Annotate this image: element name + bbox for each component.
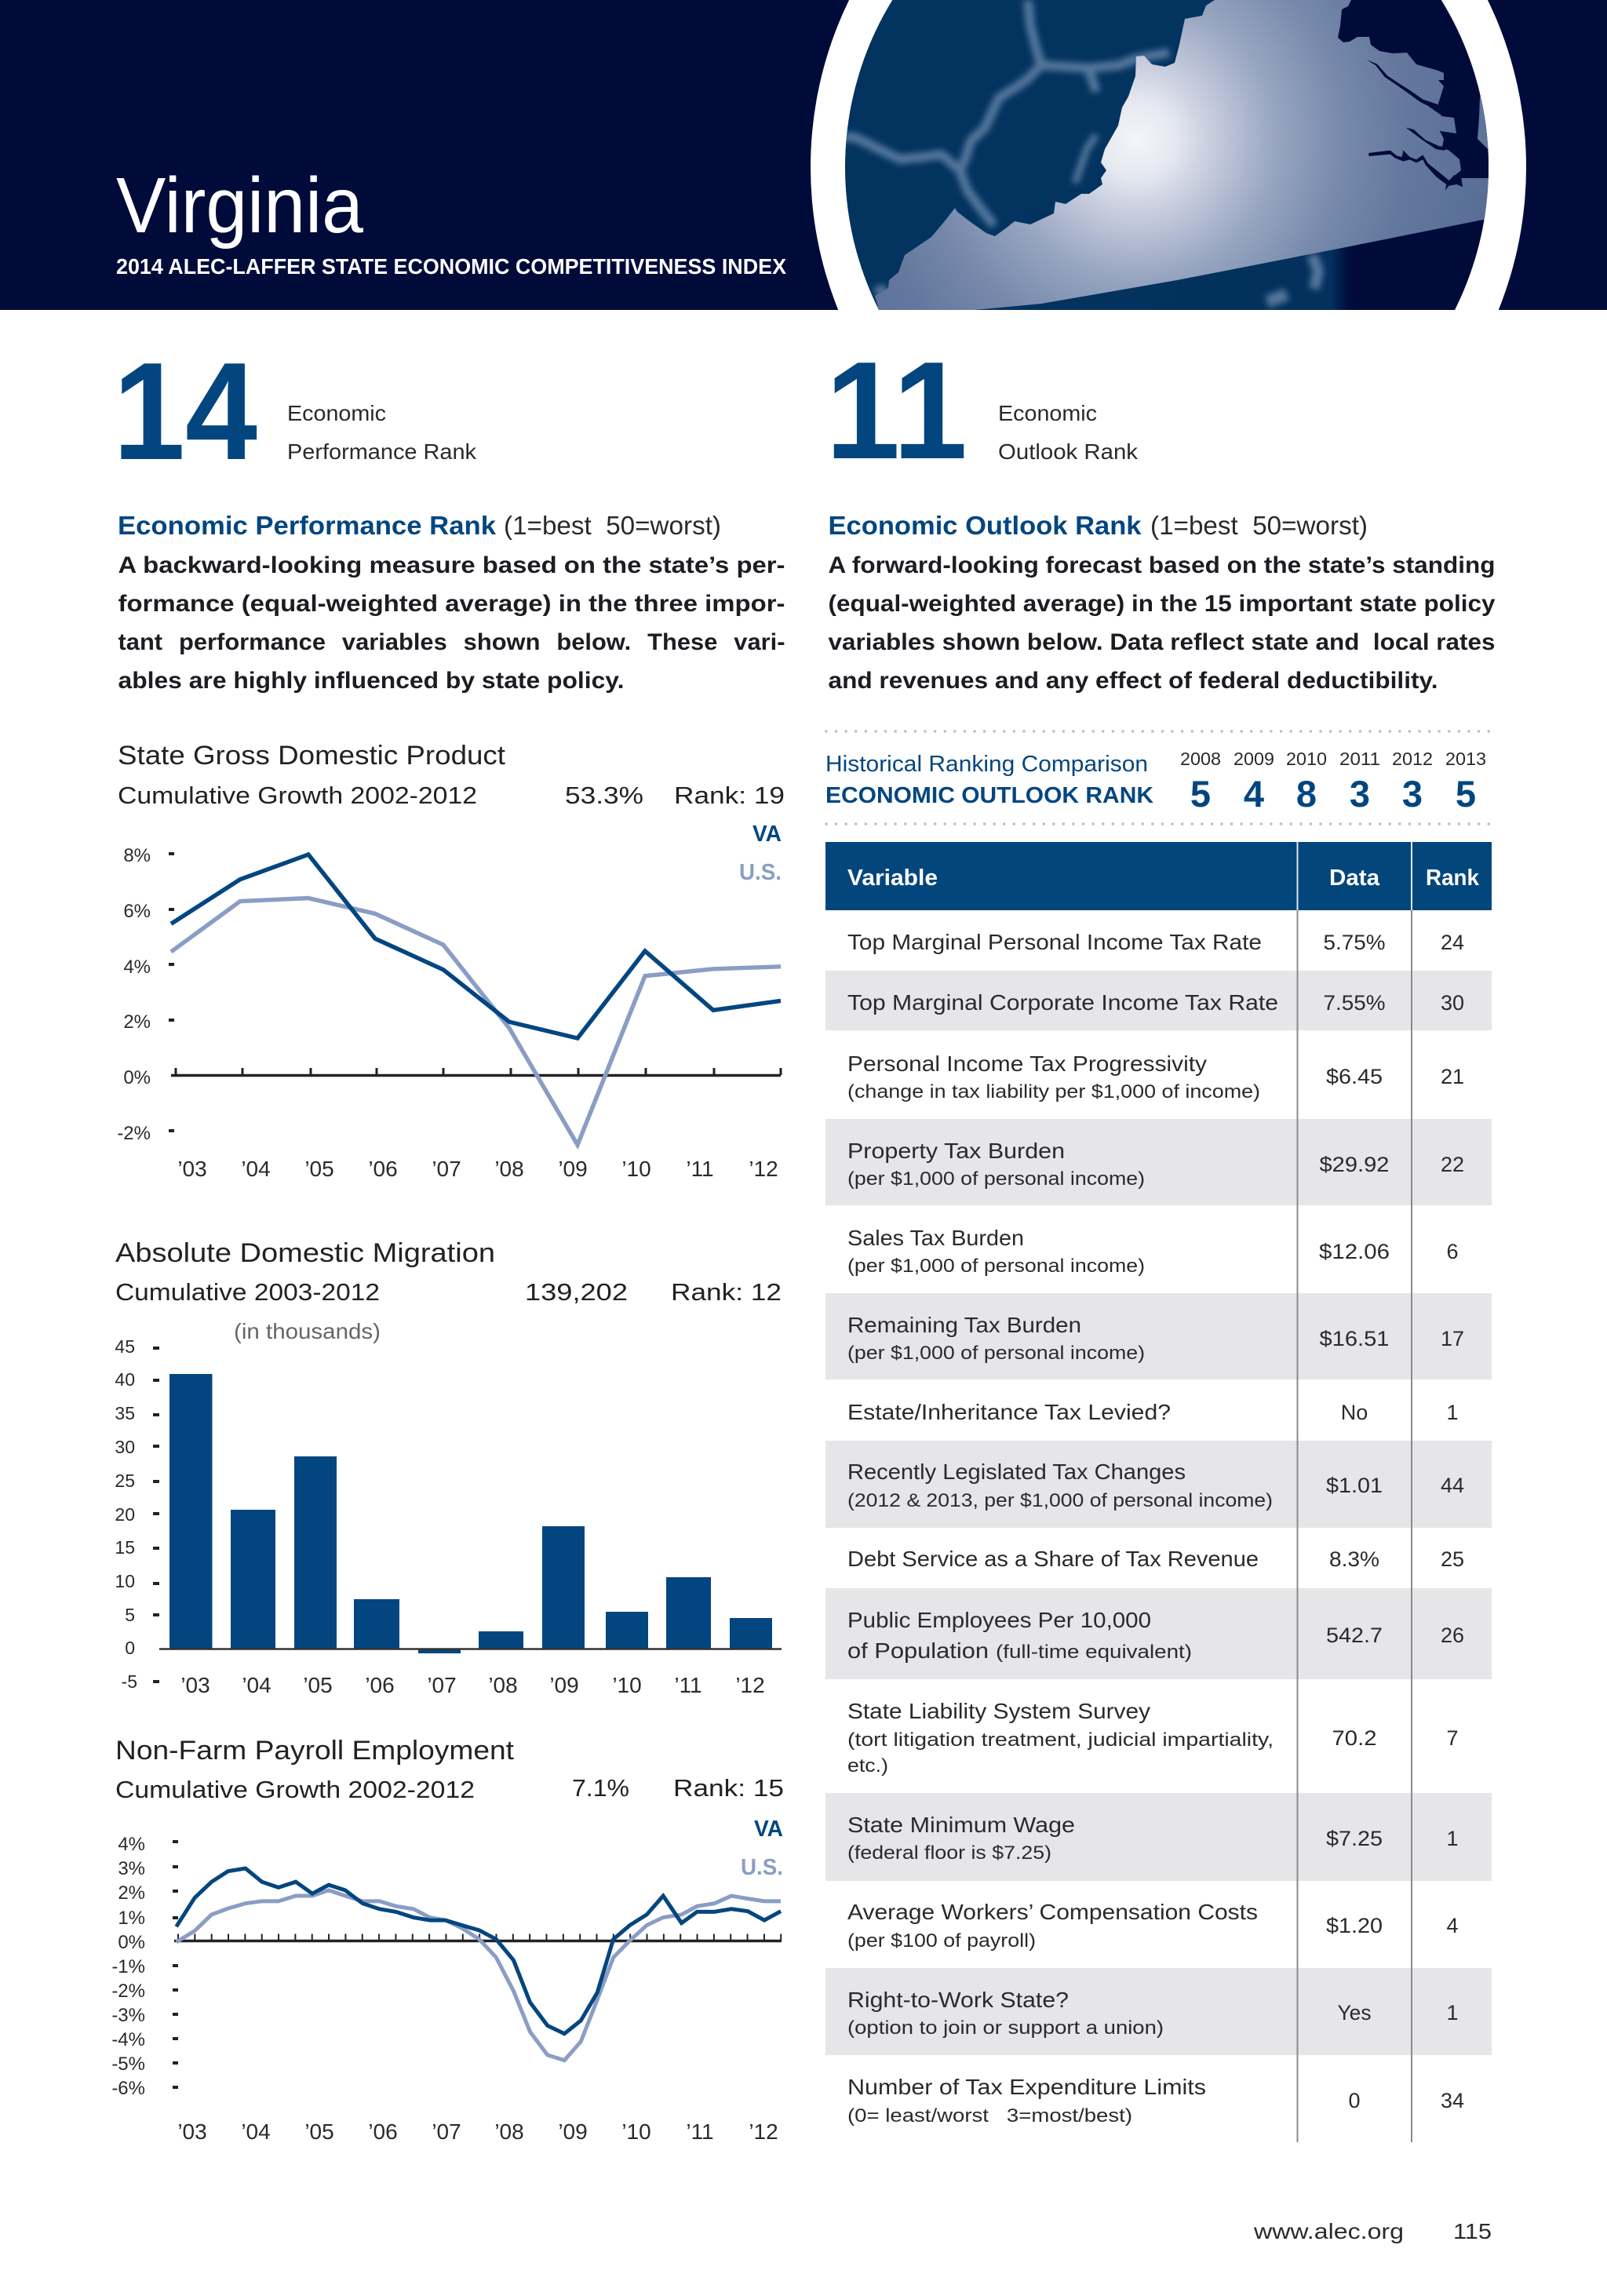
year labels: 2013 <box>1445 749 1486 769</box>
line chart: GDP growth: ’11 <box>686 1157 714 1181</box>
comparison label: ECONOMIC OUTLOOK RANK <box>825 783 1153 808</box>
bar chart: domestic migration: ’03 <box>180 1673 210 1697</box>
row: state liability system survey: 7 <box>1446 1726 1459 1750</box>
panel: economic outlook rank <box>825 333 1496 694</box>
row: top marginal personal income tax rate <box>847 930 1464 954</box>
chart heading: 53.3% <box>565 782 643 809</box>
line chart: GDP growth: ’10 <box>621 1157 651 1181</box>
bar chart: domestic migration: ’09 <box>549 1673 579 1697</box>
line chart: GDP growth: 8% <box>123 845 151 866</box>
rank values by year: 3 <box>1402 773 1423 815</box>
line chart: payroll employment: ’12 <box>749 2119 778 2144</box>
row: remaining tax burden: Remaining Tax Burden <box>847 1313 1081 1337</box>
year labels: 2008 <box>1180 749 1221 769</box>
bar chart: domestic migration: 25 <box>115 1471 135 1491</box>
chart heading: Cumulative Growth 2002-2012 <box>115 1776 475 1803</box>
line chart: GDP growth: -2% <box>117 1123 151 1144</box>
row: right-to-work state <box>847 1988 1459 2039</box>
chart heading: 139,202 <box>525 1278 628 1306</box>
line chart: GDP growth: ’05 <box>304 1157 334 1181</box>
row: personal income tax progressivity <box>847 1051 1464 1102</box>
bar chart: domestic migration: 35 <box>115 1403 135 1423</box>
line chart: payroll employment: 0% <box>118 1932 145 1953</box>
heading: Economic Performance Rank <box>118 511 497 540</box>
bar chart: domestic migration: ’06 <box>365 1673 395 1697</box>
year labels: 2011 <box>1339 749 1380 769</box>
row: personal income tax progressivity: $6.45 <box>1326 1065 1383 1088</box>
row: personal income tax progressivity: Personal Income Tax Progressivity <box>847 1051 1207 1076</box>
line chart: payroll employment: ’05 <box>304 2119 334 2144</box>
line chart: GDP growth: ’04 <box>241 1157 271 1181</box>
table header: Variable <box>847 866 938 891</box>
description text: A backward-looking measure based on the state’s per- <box>118 552 785 578</box>
line chart: payroll employment: ’07 <box>432 2119 461 2144</box>
row: property tax burden: $29.92 <box>1320 1153 1389 1176</box>
bar chart: domestic migration: 20 <box>115 1504 135 1525</box>
row: state liability system survey: etc.) <box>847 1755 888 1777</box>
rank values by year <box>1190 773 1476 815</box>
bar chart: domestic migration: 0 <box>125 1638 135 1658</box>
bar chart: domestic migration: ’04 <box>242 1673 271 1697</box>
row: right-to-work state: Yes <box>1337 2001 1372 2024</box>
bar chart: domestic migration: ’10 <box>612 1673 642 1697</box>
legend: VA <box>752 822 782 847</box>
big number: performance rank: 14 <box>113 333 257 489</box>
bar chart: domestic migration: 45 <box>115 1336 135 1357</box>
line chart: payroll employment: ’03 <box>177 2119 207 2144</box>
row: sales tax burden: Sales Tax Burden <box>847 1226 1024 1250</box>
panel: historical ranking comparison <box>825 731 1492 824</box>
line chart: GDP growth: ’09 <box>558 1157 588 1181</box>
year labels: 2012 <box>1392 749 1433 769</box>
row: top marginal personal income tax rate: Top Marginal Personal Income Tax Rate <box>847 930 1262 954</box>
row: estate/inheritance tax levied: Estate/Inheritance Tax Levied? <box>847 1400 1171 1424</box>
bar chart: domestic migration: -5 <box>122 1671 137 1692</box>
row: sales tax burden <box>847 1226 1459 1277</box>
legend <box>739 822 782 885</box>
row: state liability system survey: State Liability System Survey <box>847 1699 1150 1723</box>
row: number of tax expenditure limits: Number of Tax Expenditure Limits <box>847 2075 1206 2099</box>
row: recently legislated tax changes: 44 <box>1441 1474 1464 1497</box>
row: state minimum wage: $7.25 <box>1326 1827 1383 1850</box>
year labels <box>1180 749 1486 769</box>
bar chart: domestic migration: 30 <box>115 1437 135 1457</box>
heading: (1=best 50=worst) <box>504 511 721 540</box>
rank caption: Economic <box>998 401 1097 425</box>
chart heading: Rank: 19 <box>674 782 785 809</box>
row: number of tax expenditure limits: 34 <box>1441 2089 1464 2112</box>
rank values by year: 4 <box>1244 773 1264 815</box>
line chart: payroll employment: -6% <box>111 2078 145 2099</box>
description text: (equal-weighted average) in the 15 important state policy <box>829 591 1496 617</box>
panel: non-farm payroll employment <box>111 1736 784 2144</box>
row: average workers' compensation costs: Average Workers’ Compensation Costs <box>847 1900 1258 1924</box>
line chart: payroll employment: ’06 <box>368 2119 398 2144</box>
row: public employees per 10,000 of population: 542.7 <box>1326 1624 1383 1647</box>
row: top marginal personal income tax rate: 5.75% <box>1323 931 1386 954</box>
line chart: payroll employment: -2% <box>111 1981 145 2002</box>
row: public employees per 10,000 of population <box>847 1608 1464 1663</box>
row: sales tax burden: (per $1,000 of personal income) <box>847 1256 1145 1277</box>
chart heading: Cumulative Growth 2002-2012 <box>118 782 477 809</box>
legend: U.S. <box>739 860 782 885</box>
row: state liability system survey: (tort litigation treatment, judicial impartiality, <box>847 1729 1274 1751</box>
line chart: GDP growth: ’08 <box>494 1157 524 1181</box>
bar chart: domestic migration: 5 <box>125 1605 135 1625</box>
bar chart: domestic migration: 15 <box>115 1537 135 1558</box>
row: number of tax expenditure limits <box>847 2075 1464 2127</box>
row: top marginal corporate income tax rate: Top Marginal Corporate Income Tax Rate <box>847 990 1278 1015</box>
line chart: payroll employment: -3% <box>111 2005 145 2026</box>
bar chart: domestic migration: ’07 <box>427 1673 457 1697</box>
row: state liability system survey <box>847 1699 1459 1777</box>
panel: state gross domestic product <box>117 741 785 1181</box>
footer <box>1253 2219 1492 2243</box>
chart heading: 7.1% <box>572 1774 629 1802</box>
row: recently legislated tax changes: (2012 & 2013, per $1,000 of personal income) <box>847 1490 1273 1511</box>
line chart: payroll employment: ’09 <box>558 2119 588 2144</box>
table header: Data <box>1329 866 1380 891</box>
line chart: payroll employment: -5% <box>111 2054 145 2075</box>
line chart: GDP growth: ’06 <box>368 1157 398 1181</box>
line chart: payroll employment: -4% <box>111 2029 145 2050</box>
chart heading: Non-Farm Payroll Employment <box>115 1736 515 1766</box>
heading: (1=best 50=worst) <box>1150 511 1368 540</box>
row: average workers' compensation costs <box>847 1900 1459 1952</box>
table header: Rank <box>1426 866 1480 891</box>
heading <box>118 511 721 540</box>
chart heading: Cumulative 2003-2012 <box>115 1278 380 1306</box>
row: debt service as a share of tax revenue: 25 <box>1441 1547 1464 1571</box>
row: top marginal corporate income tax rate: 7.55% <box>1323 991 1386 1015</box>
big number: outlook rank: 11 <box>825 333 967 488</box>
heading <box>829 511 1368 540</box>
row: remaining tax burden: 17 <box>1441 1327 1464 1350</box>
rank caption: Economic <box>287 401 386 425</box>
panel: absolute domestic migration <box>115 1238 782 1697</box>
rank caption: Outlook Rank <box>998 439 1139 464</box>
row: remaining tax burden <box>847 1313 1464 1364</box>
bar chart: domestic migration: 10 <box>115 1571 135 1591</box>
chart heading: State Gross Domestic Product <box>118 741 506 771</box>
row: public employees per 10,000 of population: 26 <box>1441 1624 1464 1647</box>
chart heading: Absolute Domestic Migration <box>115 1238 495 1268</box>
rank values by year: 8 <box>1296 773 1317 815</box>
chart heading: Rank: 12 <box>671 1278 782 1306</box>
year labels: 2010 <box>1286 749 1327 769</box>
description text: formance (equal-weighted average) in the three impor- <box>118 591 785 617</box>
line chart: payroll employment: ’11 <box>686 2119 714 2144</box>
row: estate/inheritance tax levied: No <box>1341 1401 1368 1424</box>
line chart: payroll employment: 2% <box>118 1882 145 1904</box>
row: remaining tax burden: (per $1,000 of personal income) <box>847 1343 1145 1364</box>
line chart: payroll employment: ’08 <box>494 2119 524 2144</box>
chart heading <box>115 1736 784 1803</box>
rank values by year: 5 <box>1190 773 1211 815</box>
line chart: payroll employment: ’10 <box>621 2119 651 2144</box>
bar chart: domestic migration: ’12 <box>735 1673 765 1697</box>
comparison label <box>825 752 1153 808</box>
line chart: GDP growth <box>117 845 781 1181</box>
line chart: payroll employment: ’04 <box>241 2119 271 2144</box>
icon: Virginia map in circular frame <box>811 0 1526 310</box>
row: recently legislated tax changes: $1.01 <box>1326 1474 1383 1497</box>
line chart: payroll employment: 4% <box>118 1834 145 1855</box>
row: number of tax expenditure limits: (0= least/worst 3=most/best) <box>847 2105 1132 2127</box>
row: number of tax expenditure limits: 0 <box>1348 2089 1361 2112</box>
bar chart: domestic migration: ’05 <box>303 1673 333 1697</box>
line chart: GDP growth: ’12 <box>749 1157 778 1181</box>
title: Virginia <box>116 162 363 250</box>
line chart: GDP growth: ’03 <box>177 1157 207 1181</box>
row: property tax burden: 22 <box>1441 1153 1464 1176</box>
row: public employees per 10,000 of population: Public Employees Per 10,000 <box>847 1608 1151 1632</box>
description text: tant performance variables shown below. These vari- <box>118 629 785 655</box>
rank caption <box>287 401 477 464</box>
line chart: GDP growth: 0% <box>123 1067 151 1088</box>
year labels: 2009 <box>1233 749 1274 769</box>
header banner <box>0 0 1607 310</box>
chart heading: (in thousands) <box>234 1319 381 1343</box>
row: remaining tax burden: $16.51 <box>1320 1327 1389 1350</box>
row: debt service as a share of tax revenue: 8.3% <box>1329 1547 1379 1571</box>
description text <box>118 552 785 694</box>
table header <box>825 842 1492 910</box>
row: state minimum wage: (federal floor is $7.25) <box>847 1842 1051 1864</box>
description text: ables are highly influenced by state policy. <box>118 668 625 694</box>
row: personal income tax progressivity: 21 <box>1441 1065 1464 1088</box>
row: recently legislated tax changes: Recently Legislated Tax Changes <box>847 1460 1186 1484</box>
line chart: payroll employment: 3% <box>118 1858 145 1879</box>
row: personal income tax progressivity: (change in tax liability per $1,000 of income) <box>847 1081 1260 1102</box>
footer: www.alec.org <box>1253 2219 1404 2243</box>
legend: U.S. <box>741 1855 783 1880</box>
row: sales tax burden: $12.06 <box>1319 1240 1390 1263</box>
row: average workers' compensation costs: $1.20 <box>1326 1914 1383 1937</box>
row: state liability system survey: 70.2 <box>1332 1726 1376 1750</box>
row: sales tax burden: 6 <box>1446 1240 1459 1263</box>
row: property tax burden <box>847 1139 1464 1190</box>
row: estate/inheritance tax levied: 1 <box>1446 1401 1459 1424</box>
table: policy variables <box>825 842 1492 2142</box>
row: average workers' compensation costs: (per $100 of payroll) <box>847 1930 1036 1952</box>
rank values by year: 3 <box>1350 773 1370 815</box>
subtitle: 2014 ALEC-LAFFER STATE ECONOMIC COMPETITIVENESS INDEX <box>116 254 786 279</box>
row: state minimum wage: 1 <box>1446 1827 1459 1850</box>
description text: variables shown below. Data reflect state and local rates <box>829 629 1496 655</box>
line chart: GDP growth: 4% <box>123 957 151 978</box>
row: average workers' compensation costs: 4 <box>1446 1914 1459 1937</box>
row: top marginal corporate income tax rate <box>847 990 1464 1015</box>
line chart: payroll employment: 1% <box>118 1908 145 1929</box>
line chart: payroll employment: -1% <box>111 1956 145 1977</box>
line chart: GDP growth: ’07 <box>432 1157 461 1181</box>
row: public employees per 10,000 of population: of Population <box>847 1638 989 1663</box>
row: property tax burden: Property Tax Burden <box>847 1139 1065 1163</box>
rank caption <box>998 401 1139 464</box>
row: state minimum wage <box>847 1813 1459 1864</box>
description text <box>829 552 1496 694</box>
bar chart: domestic migration <box>115 1336 782 1697</box>
line chart: GDP growth: 6% <box>123 901 151 922</box>
row: state minimum wage: State Minimum Wage <box>847 1813 1075 1837</box>
row: top marginal corporate income tax rate: 30 <box>1441 991 1464 1015</box>
row: debt service as a share of tax revenue: Debt Service as a Share of Tax Revenue <box>847 1547 1259 1571</box>
row: recently legislated tax changes <box>847 1460 1464 1511</box>
bar chart: domestic migration: ’11 <box>674 1673 702 1697</box>
description text: A forward-looking forecast based on the state’s standing <box>829 552 1496 578</box>
row: debt service as a share of tax revenue <box>847 1547 1464 1571</box>
legend: VA <box>754 1817 783 1842</box>
line chart: payroll employment <box>111 1834 782 2144</box>
chart heading <box>115 1238 782 1343</box>
description text: and revenues and any effect of federal deductibility. <box>829 668 1438 694</box>
row: right-to-work state: (option to join or support a union) <box>847 2017 1164 2039</box>
chart heading <box>118 741 785 809</box>
row: right-to-work state: 1 <box>1446 2001 1459 2024</box>
row: estate/inheritance tax levied <box>847 1400 1459 1424</box>
footer: 115 <box>1453 2219 1492 2243</box>
row: property tax burden: (per $1,000 of personal income) <box>847 1168 1145 1190</box>
heading: Economic Outlook Rank <box>829 511 1142 540</box>
row: top marginal personal income tax rate: 24 <box>1441 931 1464 954</box>
panel: economic performance rank <box>113 333 785 694</box>
bar chart: domestic migration: ’08 <box>488 1673 518 1697</box>
rank values by year: 5 <box>1456 773 1476 815</box>
chart heading: Rank: 15 <box>673 1774 784 1802</box>
table row shading <box>825 971 1492 2055</box>
comparison label: Historical Ranking Comparison <box>825 752 1148 777</box>
bar chart: domestic migration: 40 <box>115 1369 135 1390</box>
legend <box>741 1817 783 1880</box>
rank caption: Performance Rank <box>287 439 477 464</box>
row: public employees per 10,000 of population: (full-time equivalent) <box>996 1642 1192 1663</box>
line chart: GDP growth: 2% <box>123 1011 151 1033</box>
row: right-to-work state: Right-to-Work State? <box>847 1988 1069 2012</box>
